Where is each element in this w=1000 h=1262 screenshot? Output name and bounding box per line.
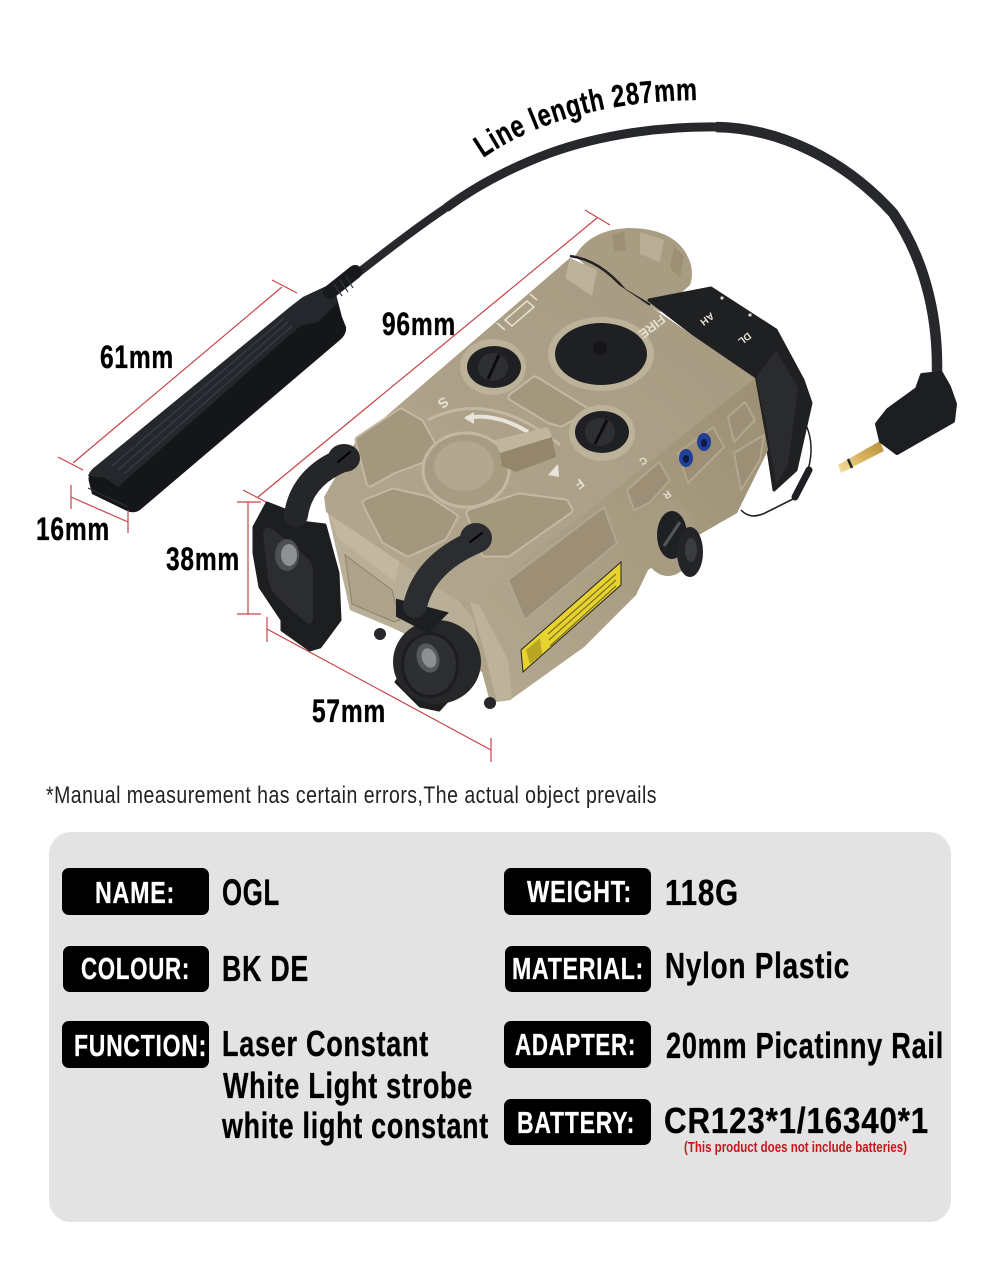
spec: colour bbox=[63, 946, 309, 992]
plug: right-angle jack bbox=[838, 373, 955, 473]
top face bbox=[324, 258, 755, 602]
laser warning label bbox=[521, 562, 621, 672]
battery marking bbox=[497, 294, 537, 330]
spec: material: MATERIAL: bbox=[512, 951, 644, 986]
side face recesses bbox=[508, 402, 764, 620]
dimension labels: 61mm bbox=[100, 339, 174, 375]
spec: battery bbox=[504, 1099, 929, 1156]
rear black cap bbox=[649, 288, 811, 490]
spec: name: OGL bbox=[222, 872, 280, 913]
panel: specifications bbox=[49, 832, 951, 1222]
rear knurled knob bbox=[570, 228, 692, 312]
mounting screws bbox=[374, 628, 496, 709]
spec: name: NAME: bbox=[95, 875, 175, 910]
rear black cap: DL bbox=[736, 330, 753, 346]
dimension labels bbox=[36, 306, 456, 729]
left front lens housing bbox=[254, 503, 340, 650]
spec: function bbox=[62, 1021, 489, 1146]
selector dial bbox=[423, 427, 556, 507]
spec: function: white light constant bbox=[221, 1105, 489, 1146]
spec: function: FUNCTION: bbox=[74, 1028, 207, 1063]
dimension labels: 96mm bbox=[382, 306, 456, 342]
spec: function: Laser Constant bbox=[222, 1023, 429, 1064]
spec: battery: CR123*1/16340*1 bbox=[664, 1100, 929, 1141]
spec: battery: (This product does not include batteries) bbox=[684, 1139, 907, 1156]
spec: battery: BATTERY: bbox=[517, 1105, 635, 1140]
dimension labels: 16mm bbox=[36, 511, 110, 547]
spec: adapter bbox=[504, 1021, 944, 1068]
spec: function: White Light strobe bbox=[223, 1065, 473, 1106]
device: OGL laser unit: C bbox=[636, 454, 649, 467]
spec: material bbox=[505, 945, 850, 992]
spec: colour: BK DE bbox=[222, 948, 309, 989]
device: OGL laser unit bbox=[254, 228, 811, 710]
blue screws bbox=[679, 433, 711, 467]
right rubber clip bbox=[397, 524, 491, 632]
spec: adapter: ADAPTER: bbox=[515, 1027, 636, 1062]
top face recesses bbox=[359, 380, 584, 553]
spec: colour: COLOUR: bbox=[81, 951, 190, 986]
front face bbox=[326, 505, 482, 672]
dimension lines bbox=[58, 210, 610, 762]
fire button: FIRE bbox=[636, 312, 668, 342]
lower body silhouette bbox=[326, 258, 768, 702]
device: OGL laser unit: F bbox=[572, 476, 587, 492]
cable bbox=[345, 127, 937, 372]
remote pressure switch bbox=[88, 272, 355, 512]
side face bbox=[470, 378, 768, 702]
left rubber clip bbox=[296, 445, 359, 515]
spec: weight: 118G bbox=[665, 872, 739, 913]
spec: name bbox=[62, 868, 280, 915]
mode selector arc and arrow bbox=[428, 408, 560, 445]
spec: weight bbox=[504, 868, 739, 915]
dimension labels: 38mm bbox=[166, 541, 240, 577]
dimension labels: 57mm bbox=[312, 693, 386, 729]
spec: weight: WEIGHT: bbox=[527, 874, 632, 909]
adjustment knobs bbox=[460, 339, 526, 395]
lanyard bbox=[741, 425, 811, 516]
fire button bbox=[548, 312, 668, 391]
measurement note: *Manual measurement has certain errors,The actual object prevails bbox=[46, 782, 657, 809]
right front lens housing bbox=[393, 620, 481, 710]
rear black cap: AH bbox=[698, 310, 716, 327]
device: OGL laser unit: C bbox=[462, 350, 475, 363]
spec: material: Nylon Plastic bbox=[665, 945, 850, 986]
side markings: R bbox=[660, 488, 673, 501]
mode letters: S bbox=[435, 394, 452, 412]
cable length label: Line length 287mm bbox=[472, 80, 696, 158]
